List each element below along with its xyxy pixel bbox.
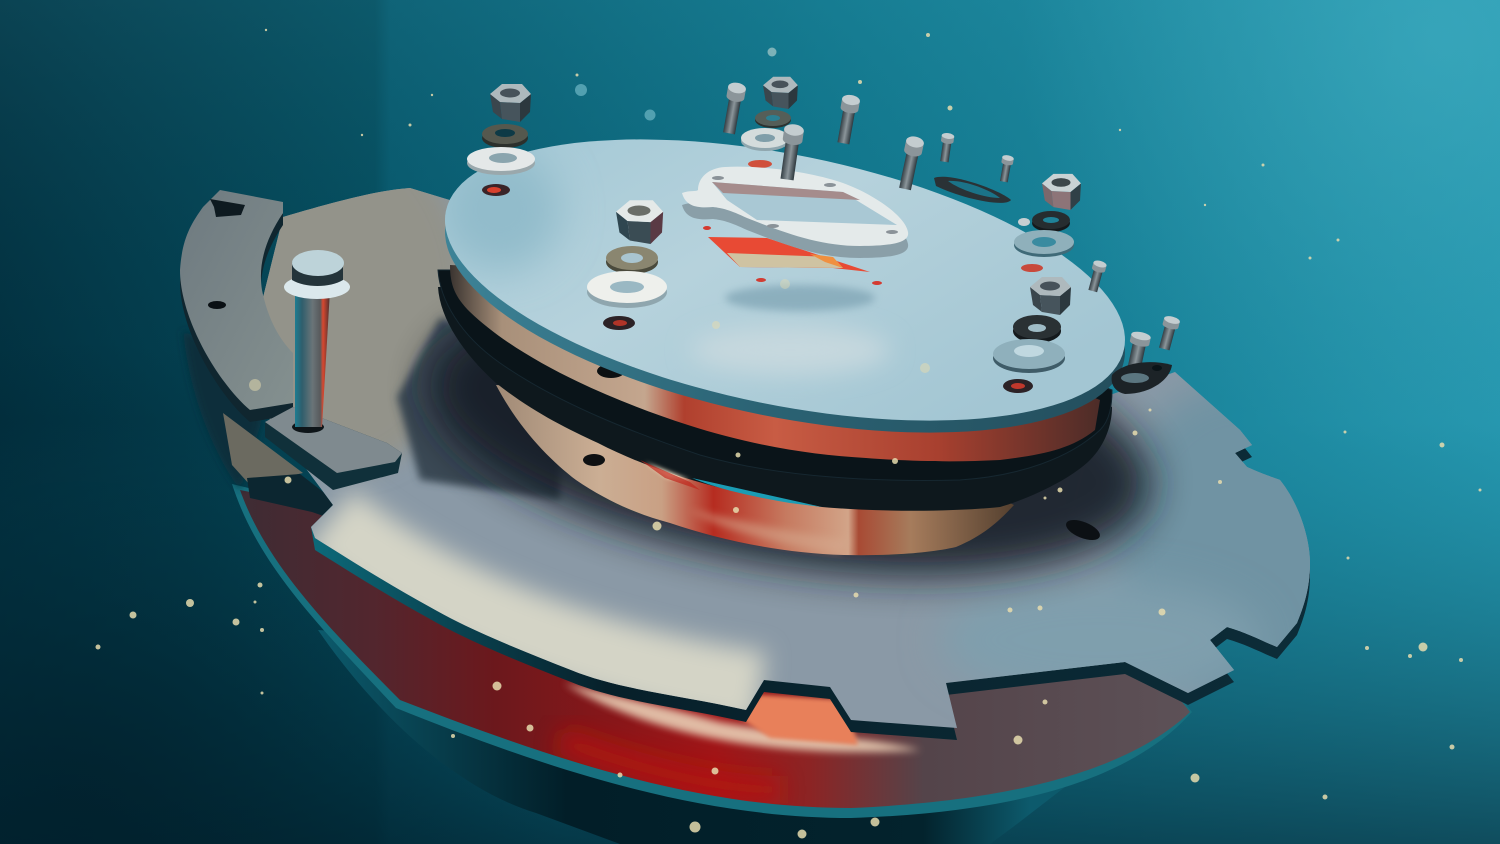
cream band — [330, 520, 760, 690]
holes — [482, 184, 510, 196]
gasket plate — [682, 179, 908, 258]
left curved arc segment — [180, 190, 293, 422]
tan upper disc — [450, 265, 1100, 461]
hardware stack: top centre — [741, 77, 798, 151]
surface and tab under left arc — [183, 330, 340, 520]
hardware stack: centre disc — [587, 200, 667, 308]
red glow and hot band — [560, 683, 921, 790]
lower rust disc — [232, 484, 1192, 818]
hardware stack: upper left — [467, 84, 535, 175]
black stacked disc, upper — [438, 270, 1112, 480]
tan lower disc — [496, 385, 1014, 555]
hardware stack: far right — [1014, 174, 1081, 257]
top light blue disc — [445, 139, 1125, 433]
stack shadow — [404, 314, 1178, 606]
hardware stack: right disc — [993, 277, 1071, 373]
clamp bar with flange bolt — [265, 250, 402, 490]
small gaskets — [934, 177, 1172, 394]
teal sliver and glint — [640, 460, 822, 507]
lower dark disc underside — [318, 630, 1100, 844]
warm upper left area — [264, 188, 456, 460]
soft shadow edge on left — [397, 318, 560, 500]
right cool area — [1106, 384, 1310, 690]
loose screws — [720, 81, 1181, 371]
red window — [708, 237, 870, 272]
black stacked disc, lower — [438, 280, 1112, 511]
main plate — [263, 188, 1310, 740]
